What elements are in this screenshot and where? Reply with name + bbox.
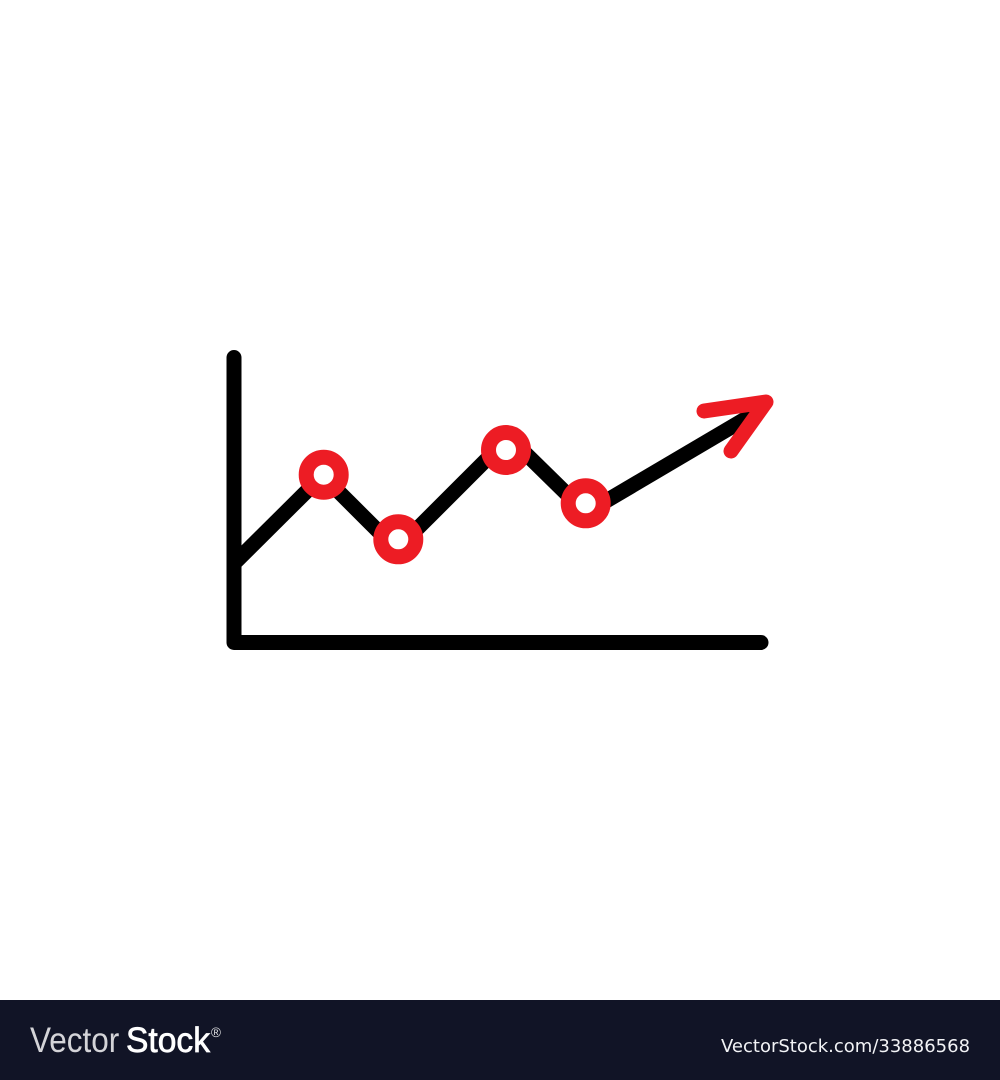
data point 4 (568, 486, 603, 521)
data point 3 (488, 432, 524, 468)
VectorStock logo: Stock (126, 1021, 210, 1060)
data point 1 (306, 457, 341, 492)
VectorStock logo (30, 1021, 221, 1060)
chart axes (234, 358, 761, 642)
data point 2 (381, 522, 416, 557)
footer bar (0, 1000, 1000, 1080)
VectorStock logo: Vector (30, 1021, 119, 1060)
arrowhead (704, 402, 766, 451)
image reference: VectorStock.com/33886568 (721, 1036, 970, 1056)
trend line (236, 415, 752, 562)
VectorStock logo: ® (211, 1025, 221, 1040)
